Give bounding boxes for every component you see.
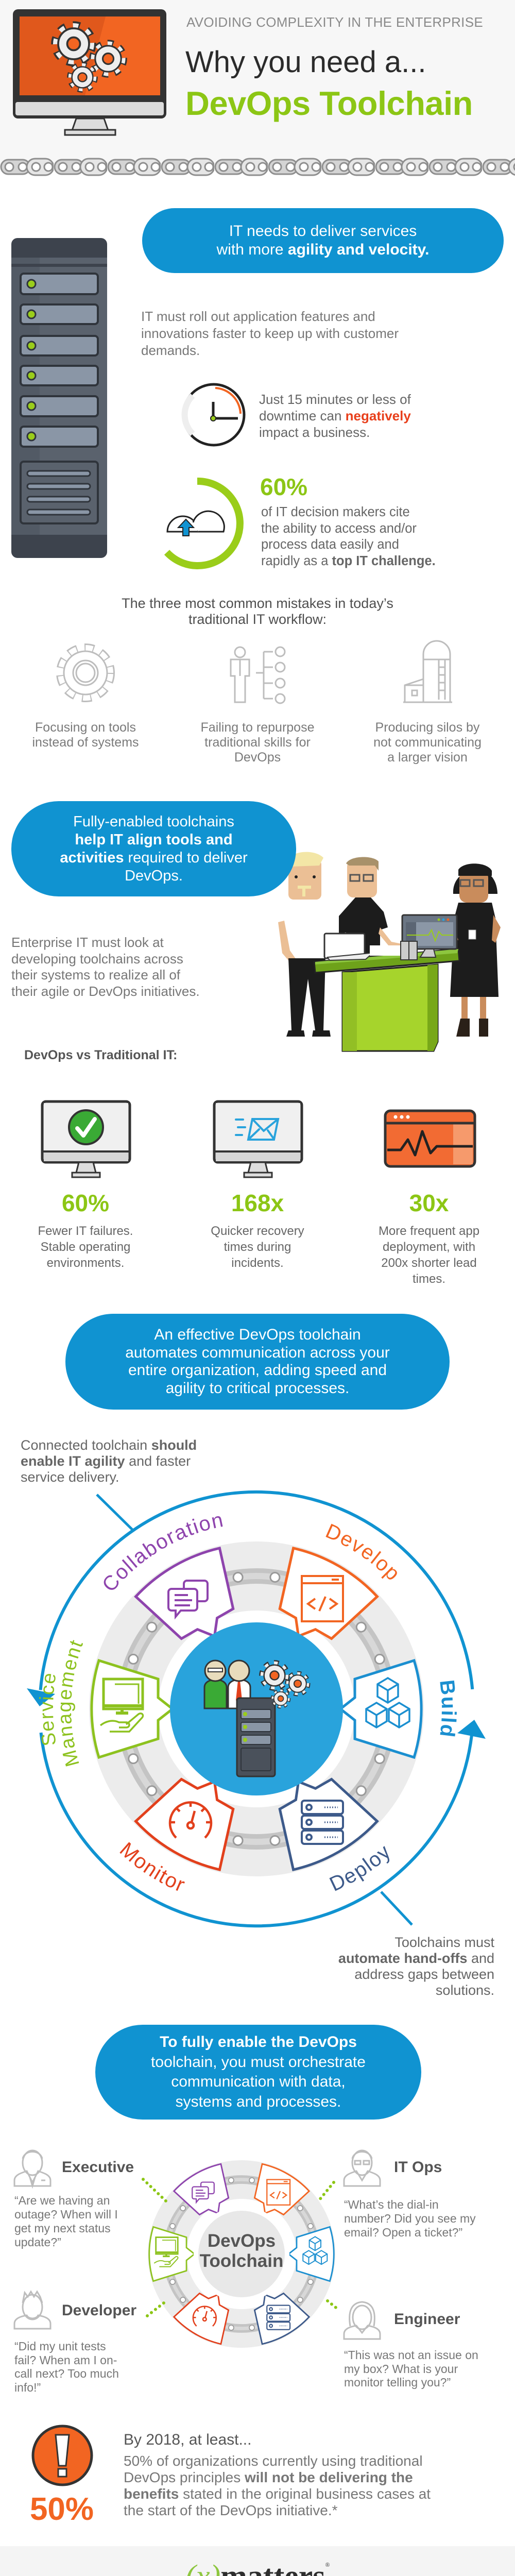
persona: executive label: Executive <box>62 2159 134 2176</box>
text: toolchains must automate: Toolchains must <box>394 1935 494 1950</box>
wheel stage labels (curved text): Build <box>440 1681 457 1736</box>
header background <box>0 0 515 167</box>
persona: executive quote <box>14 2194 118 2249</box>
text: mistake 2: Failing to repurpose <box>201 720 314 735</box>
text: small wheel title <box>200 2231 283 2271</box>
blue cycle arrows <box>41 1492 472 1926</box>
callout: fully-enabled toolchains: help IT align tools and <box>75 832 233 848</box>
text: enterprise IT: Enterprise IT must look at <box>11 935 164 950</box>
text: mistake 3 <box>373 720 482 765</box>
text: mistake 1: instead of systems <box>32 735 139 750</box>
text: enterprise IT <box>11 935 200 999</box>
text: roll out features <box>141 309 399 358</box>
icon: browser heartbeat <box>385 1111 475 1166</box>
text: 2018 prediction: DevOps principles will not be delivering the <box>124 2469 413 2485</box>
callout: orchestrate communication: To fully enable the DevOps <box>160 2033 357 2050</box>
desk monitor <box>401 915 457 960</box>
persona: IT Ops quote: email? Open a ticket?” <box>344 2226 462 2239</box>
wheel stage labels (curved text): Monitor <box>119 1842 185 1891</box>
heading: three mistakes <box>122 596 393 627</box>
icon: person with skill nodes <box>231 647 285 703</box>
text: stat 1 label: environments. <box>47 1256 124 1270</box>
person: woman <box>450 863 501 1037</box>
persona: engineer quote: “This was not an issue on <box>344 2348 478 2362</box>
persona: executive quote: “Are we having an <box>14 2194 110 2207</box>
heading: by 2018: By 2018, at least... <box>124 2431 251 2448</box>
text: small wheel title: Toolchain <box>200 2251 283 2271</box>
person: middle man <box>339 857 402 958</box>
text: mistake 3: Producing silos by <box>375 720 479 735</box>
callout: orchestrate communication <box>95 2025 421 2120</box>
desk <box>314 949 459 1051</box>
stat: 50%: 50% <box>30 2492 94 2527</box>
persona: IT Ops quote <box>344 2198 476 2239</box>
callout: agility and velocity: IT needs to deliver services <box>229 223 417 240</box>
text: toolchains must automate: address gaps between <box>354 1967 494 1982</box>
title: main line: Why you need a... <box>185 45 426 79</box>
person: left man <box>278 852 331 1037</box>
text: toolchains must automate <box>338 1935 494 1998</box>
persona: engineer quote <box>344 2348 478 2389</box>
callout: orchestrate communication: communication with data, <box>171 2073 346 2090</box>
persona: developer quote: info!” <box>14 2380 41 2394</box>
icon: executive persona <box>14 2150 50 2186</box>
text: 2018 prediction <box>124 2453 431 2518</box>
text: mistake 3: not communicating <box>373 735 482 750</box>
pointer line bottom <box>381 1892 412 1925</box>
icon: engineer persona <box>344 2302 380 2339</box>
wheel stage labels (curved text): Collaboration <box>104 1516 222 1590</box>
callout: effective toolchain: automates communication across your <box>125 1344 390 1361</box>
icon: IT ops persona <box>344 2150 380 2186</box>
text: enterprise IT: their systems to realize all of <box>11 967 180 982</box>
text: stat 3 label: times. <box>413 1272 445 1286</box>
chain divider <box>0 152 515 181</box>
pointer line top <box>97 1495 133 1530</box>
icon: monitor with check <box>42 1101 130 1177</box>
text: toolchains must automate: solutions. <box>436 1982 494 1998</box>
text: stat 2 label: Quicker recovery <box>211 1224 304 1238</box>
stat: 60%: 60% <box>260 473 307 500</box>
stat: 60% fewer failures: 60% <box>62 1190 109 1216</box>
title: DevOps Toolchain: DevOps Toolchain <box>185 84 473 122</box>
text: 2018 prediction: the start of the DevOps initiative.* <box>124 2502 338 2518</box>
callout: fully-enabled toolchains: activities required to deliver <box>60 849 248 866</box>
text: downtime stat <box>259 392 411 440</box>
callout: orchestrate communication: systems and processes. <box>176 2093 341 2110</box>
persona: developer quote: call next? Too much <box>14 2367 119 2380</box>
text: mistake 2: DevOps <box>234 750 281 765</box>
persona: developer quote <box>14 2340 119 2394</box>
callout: effective toolchain <box>65 1314 450 1410</box>
text: stat 3 label: 200x shorter lead <box>381 1256 477 1270</box>
icon: server tower <box>11 238 107 558</box>
text: connected toolchain <box>21 1437 197 1485</box>
illustration: team at desk <box>278 852 501 1051</box>
text: stat 1 label: Stable operating <box>41 1240 130 1254</box>
persona: engineer quote: monitor telling you?” <box>344 2376 451 2389</box>
text: 2018 prediction: 50% of organizations currently using traditional <box>124 2453 423 2469</box>
text: enterprise IT: developing toolchains across <box>11 951 183 967</box>
footer background <box>0 2546 515 2576</box>
text: mistake 2: traditional skills for <box>204 735 311 750</box>
persona: IT Ops label: IT Ops <box>394 2159 442 2176</box>
title: kicker: AVOIDING COMPLEXITY IN THE ENTERPRISE <box>186 14 483 30</box>
text: downtime stat: Just 15 minutes or less of <box>259 392 411 407</box>
callout: agility and velocity: with more agility and velocity. <box>217 241 429 258</box>
callout: effective toolchain: An effective DevOps toolchain <box>154 1326 361 1343</box>
callout: fully-enabled toolchains: DevOps. <box>125 868 183 884</box>
text: roll out features: innovations faster to keep up with customer <box>141 326 399 341</box>
icon: exclamation warning <box>33 2426 92 2485</box>
text: downtime stat: impact a business. <box>259 425 370 440</box>
icon: silo <box>403 641 452 702</box>
callout: fully-enabled toolchains <box>11 801 296 896</box>
diagram: connected toolchain wheel <box>27 1492 486 1926</box>
heading: three mistakes: The three most common mistakes in today’s <box>122 596 393 611</box>
text: connected toolchain: enable IT agility and faster <box>21 1453 191 1469</box>
wheel stage labels (curved text): Develop <box>325 1524 397 1580</box>
icon: monitor with email <box>214 1101 302 1177</box>
persona: developer label: Developer <box>62 2302 136 2319</box>
persona: engineer label: Engineer <box>394 2311 460 2328</box>
stat: 30x: 30x <box>409 1190 449 1216</box>
persona: IT Ops quote: number? Did you see my <box>344 2212 476 2225</box>
icon: gear (focusing on tools) <box>61 648 110 698</box>
text: stat 2 label: times during <box>224 1240 291 1254</box>
stat: 168x: 168x <box>231 1190 284 1216</box>
text: mistake 1 <box>32 720 139 750</box>
text: stat 3 label: deployment, with <box>383 1240 475 1254</box>
text: roll out features: demands. <box>141 343 200 358</box>
centre circle with team and server <box>170 1622 343 1795</box>
persona: executive quote: get my next status <box>14 2222 111 2235</box>
text: mistake 2 <box>201 720 314 765</box>
persona: executive quote: outage? When will I <box>14 2208 118 2221</box>
icon: clock <box>183 384 244 445</box>
callout: effective toolchain: agility to critical processes. <box>166 1380 349 1396</box>
icon: 60% ring with cloud <box>167 481 240 566</box>
text: stat 3 label: More frequent app <box>379 1224 479 1238</box>
wheel stage labels (curved text): Management <box>61 1640 83 1767</box>
text: mistake 1: Focusing on tools <box>35 720 136 735</box>
callout: effective toolchain: entire organization, adding speed and <box>128 1362 387 1379</box>
icon: developer persona <box>14 2292 50 2329</box>
persona: engineer quote: my box? What is your <box>344 2362 458 2375</box>
text: stat 2 label <box>211 1224 304 1270</box>
text: 2018 prediction: benefits stated in the original business cases at <box>124 2486 431 2502</box>
persona: executive quote: update?” <box>14 2235 61 2249</box>
laptop <box>324 934 401 960</box>
heading: three mistakes: traditional IT workflow: <box>188 612 327 627</box>
wheel stage labels (curved text): Deploy <box>330 1846 389 1891</box>
persona: IT Ops quote: “What’s the dial-in <box>344 2198 439 2211</box>
text: enterprise IT: their agile or DevOps initiatives. <box>11 984 200 999</box>
text: stat 3 label <box>379 1224 479 1286</box>
callout: agility and velocity <box>142 208 504 273</box>
text: connected toolchain: service delivery. <box>21 1469 119 1485</box>
text: 60% description: of IT decision makers cite <box>261 505 410 519</box>
text: connected toolchain: Connected toolchain should <box>21 1437 197 1453</box>
icon: header monitor with gears <box>13 9 166 135</box>
callout: orchestrate communication: toolchain, you must orchestrate <box>151 2054 366 2070</box>
text: toolchains must automate: automate hand-offs and <box>338 1951 494 1966</box>
text: 60% description <box>261 505 436 568</box>
text: stat 1 label: Fewer IT failures. <box>38 1224 133 1238</box>
callout: fully-enabled toolchains: Fully-enabled toolchains <box>73 813 234 829</box>
persona: developer quote: “Did my unit tests <box>14 2340 106 2353</box>
green dotted connectors <box>143 2179 338 2316</box>
text: 60% description: process data easily and <box>261 537 399 552</box>
text: 60% description: rapidly as a top IT challenge. <box>261 554 436 568</box>
wheel stage labels (curved text): Service <box>39 1674 56 1745</box>
wheel with six stage bubbles <box>92 1542 421 1876</box>
persona: developer quote: fail? When am I on- <box>14 2353 117 2367</box>
text: 60% description: the ability to access and/or <box>261 521 417 536</box>
heading: DevOps vs Traditional IT: DevOps vs Traditional IT: <box>24 1048 177 1062</box>
diagram: small toolchain wheel <box>149 2160 334 2348</box>
text: downtime stat: downtime can negatively <box>259 408 411 423</box>
text: mistake 3: a larger vision <box>387 750 468 765</box>
text: stat 1 label <box>38 1224 133 1270</box>
text: stat 2 label: incidents. <box>231 1256 284 1270</box>
text: roll out features: IT must roll out application features and <box>141 309 375 324</box>
text: small wheel title: DevOps <box>208 2231 276 2251</box>
